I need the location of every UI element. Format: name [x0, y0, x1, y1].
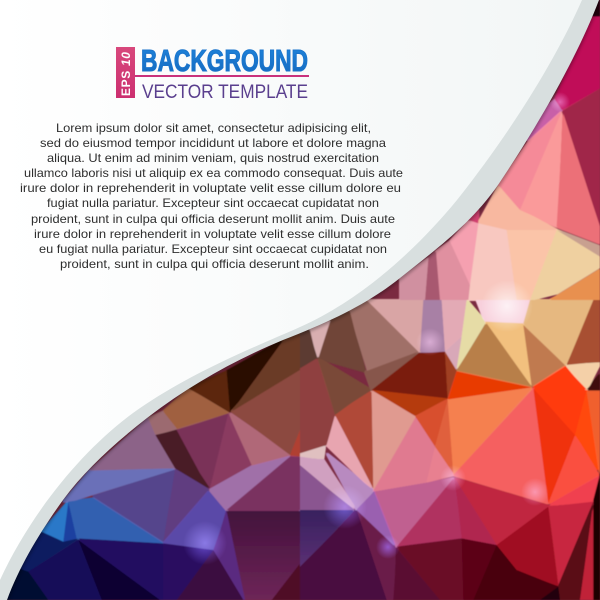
- logo block: [116, 43, 309, 103]
- mesh: lower left blue and violet facets: [0, 332, 300, 600]
- body text: irure dolor in reprehenderit in voluptate velit esse cillum dolore eu: [20, 181, 401, 195]
- mesh: centre and lower right red facets: [300, 300, 600, 600]
- body text: Lorem ipsum dolor sit amet, consectetur adipisicing elit,: [56, 121, 371, 135]
- body text: ullamco laboris nisi ut aliquip ex ea commodo consequat. Duis aute: [24, 166, 403, 180]
- body text: [20, 121, 403, 271]
- EPS badge: [116, 47, 135, 98]
- body text: aliqua. Ut enim ad minim veniam, quis nostrud exercitation: [47, 151, 379, 165]
- body text: fugiat nulla pariatur. Excepteur sint occaecat cupidatat non: [47, 196, 379, 210]
- body text: sed do eiusmod tempor incididunt ut labore et dolore magna: [40, 136, 386, 150]
- body text: eu fugiat nulla pariatur. Excepteur sint occaecat cupidatat non: [39, 242, 387, 256]
- body text: proident, sunt in culpa qui officia deserunt mollit anim. Duis aute: [31, 212, 395, 226]
- heading rule: [135, 75, 309, 77]
- heading: BACKGROUND: BACKGROUND: [141, 43, 308, 78]
- EPS badge: EPS 10: [119, 52, 133, 96]
- mesh: upper right pink and peach facets: [400, 0, 600, 300]
- body text: proident, sunt in culpa qui officia deserunt mollit anim.: [60, 257, 369, 271]
- body text: irure dolor in reprehenderit in voluptate velit esse cillum dolore: [34, 227, 391, 241]
- subheading: VECTOR TEMPLATE: VECTOR TEMPLATE: [142, 82, 308, 103]
- lens flares: [183, 92, 570, 565]
